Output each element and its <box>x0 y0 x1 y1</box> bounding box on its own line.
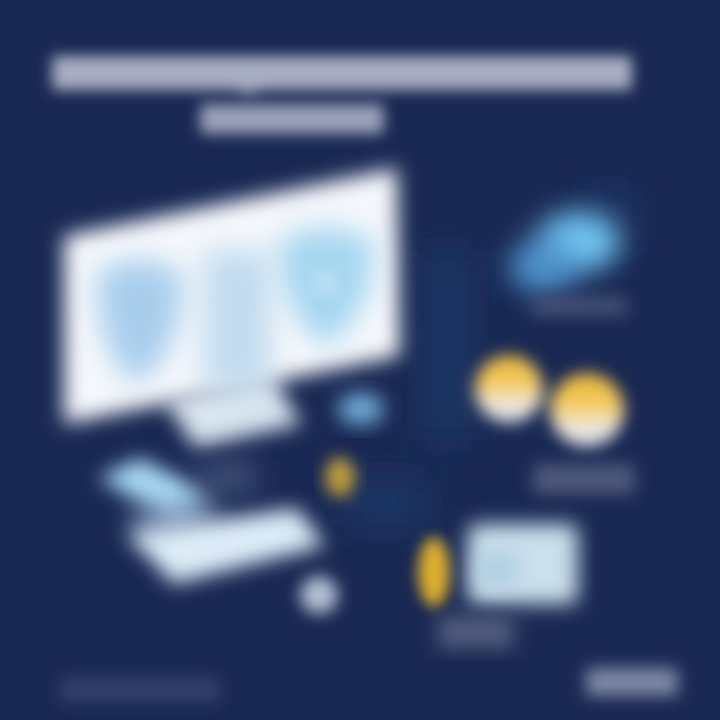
coin label <box>533 464 635 494</box>
title text: Advantages of Distributed <box>50 54 634 95</box>
small blue chip <box>338 393 384 425</box>
shield highlights <box>315 273 335 293</box>
keyboard <box>128 508 325 584</box>
connector glow lines <box>345 190 630 525</box>
footer left text: Distributed platforms <box>62 682 218 698</box>
title second line: Platforms <box>200 102 384 138</box>
document card highlight <box>478 552 518 586</box>
right shield <box>280 226 374 346</box>
gold coin small <box>325 457 355 497</box>
cloud label: Cloud access <box>535 299 625 315</box>
left shield <box>98 258 182 384</box>
cloud icon <box>509 212 620 294</box>
monitor stand <box>165 375 302 448</box>
coin label: Cost savings <box>535 471 633 487</box>
mouse <box>300 576 338 614</box>
monitor illustration <box>64 168 400 448</box>
footer left text <box>60 678 220 702</box>
upper shade panel <box>198 460 256 496</box>
coin pair icon <box>475 355 624 447</box>
document label: Reports <box>440 623 512 639</box>
tablet <box>98 458 214 522</box>
monitor screen <box>64 168 400 424</box>
connector between tablet and keyboard <box>130 495 220 545</box>
footer right logo <box>586 668 678 696</box>
keyboard and devices <box>98 458 338 614</box>
document label <box>438 616 514 648</box>
gold bar <box>418 537 450 607</box>
document card <box>468 524 578 604</box>
title <box>50 54 634 95</box>
footer right logo: Platform <box>590 675 674 692</box>
centre panel <box>203 250 271 390</box>
